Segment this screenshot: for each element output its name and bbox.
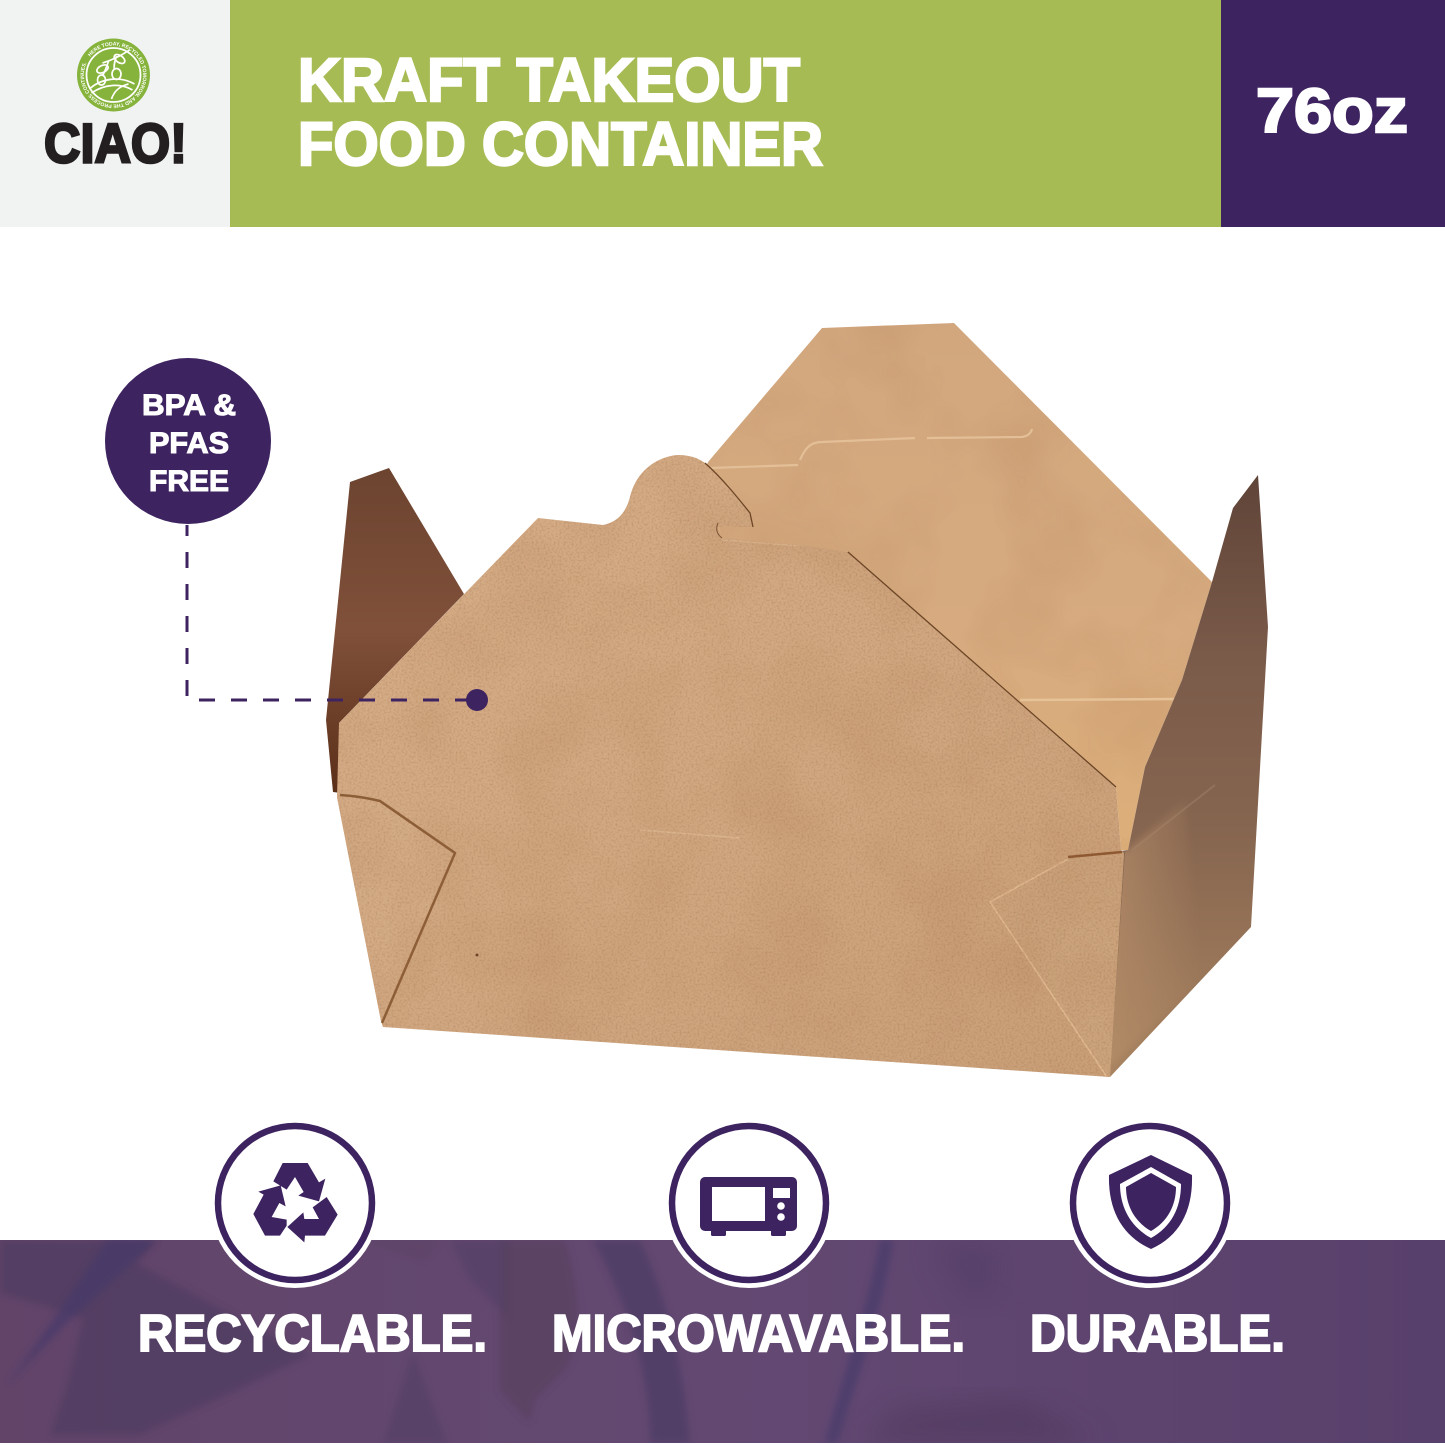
box back lid flap xyxy=(700,320,1220,860)
title line 1: KRAFT TAKEOUT xyxy=(298,46,800,114)
footer band with leaf background xyxy=(0,1240,1445,1443)
box right side panel xyxy=(1100,475,1268,1077)
durable label: DURABLE. xyxy=(1030,1305,1285,1363)
callout dot xyxy=(466,689,488,711)
recyclable icon xyxy=(210,1118,380,1288)
header: title panel xyxy=(230,0,1221,227)
header: logo panel xyxy=(0,0,230,227)
microwave icon xyxy=(664,1118,834,1288)
logo emblem: HERE TODAY, RECYCLED TOMORROW, AND THE PROCESS CONTINUES. xyxy=(80,42,147,108)
title line 2: FOOD CONTAINER xyxy=(298,110,823,178)
callout: BPA and PFAS free xyxy=(105,358,488,711)
callout badge: BPA & xyxy=(142,389,236,422)
header: size panel xyxy=(1221,0,1445,227)
callout badge: PFAS xyxy=(149,427,229,460)
shield icon xyxy=(1065,1118,1235,1288)
product photo: kraft takeout box xyxy=(326,320,1268,1080)
callout badge xyxy=(105,358,271,524)
box right folded tab xyxy=(990,852,1124,1077)
box front lid and body xyxy=(337,455,1124,1077)
callout badge: FREE xyxy=(149,465,229,498)
box left folded tab xyxy=(337,795,455,1023)
box left inner flap xyxy=(326,468,464,793)
feature: recyclable xyxy=(138,1118,487,1363)
callout leader line xyxy=(187,525,477,700)
recyclable label: RECYCLABLE. xyxy=(138,1305,487,1363)
feature: microwavable xyxy=(552,1118,965,1363)
microwavable label: MICROWAVABLE. xyxy=(552,1305,965,1363)
size label: 76oz xyxy=(1256,77,1408,146)
feature: durable xyxy=(1030,1118,1285,1363)
logo wordmark: CIAO! xyxy=(44,112,187,174)
